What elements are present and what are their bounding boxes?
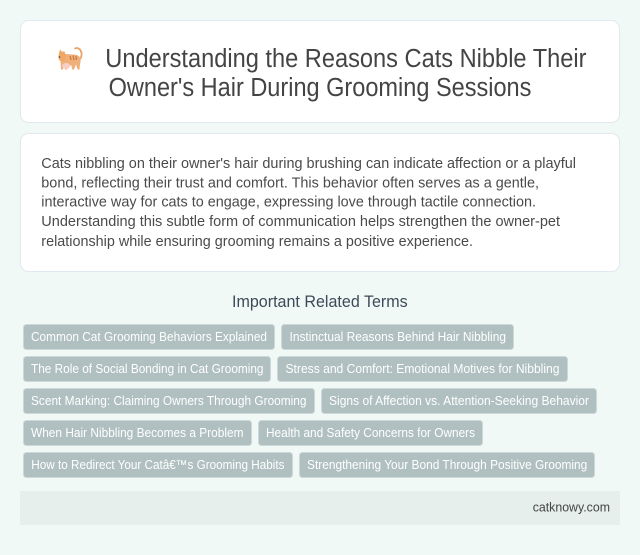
text block: description: Cats nibbling on their owner's hair during brushing can indicate affection or a playful <box>41 156 576 172</box>
tag 10 <box>300 452 594 478</box>
tag 6 <box>322 388 596 414</box>
text block: description: relationship while ensuring grooming remains a positive experience. <box>41 234 473 250</box>
tag 7: When Hair Nibbling Becomes a Problem <box>31 426 244 440</box>
tag 1: Common Cat Grooming Behaviors Explained <box>31 330 267 344</box>
tag 8 <box>258 420 482 446</box>
text block: description: interactive way for cats to engage, expressing love through tactile connection. <box>41 195 536 211</box>
tags: related terms <box>24 324 596 478</box>
tag 10: Strengthening Your Bond Through Positive Grooming <box>307 458 587 472</box>
tag 4 <box>278 356 568 382</box>
tag 5: Scent Marking: Claiming Owners Through Grooming <box>31 394 306 408</box>
tag 1 <box>24 324 274 350</box>
tag 3: The Role of Social Bonding in Cat Grooming <box>31 362 264 376</box>
tag 8: Health and Safety Concerns for Owners <box>266 426 475 440</box>
tag 7 <box>24 420 252 446</box>
tag 6: Signs of Affection vs. Attention-Seeking Behavior <box>329 394 589 408</box>
title: Understanding the Reasons Cats Nibble Their <box>105 45 587 73</box>
footer <box>20 491 620 525</box>
title <box>105 45 587 102</box>
heading: important related terms: Important Related Terms <box>232 293 408 311</box>
tag 5 <box>24 388 314 414</box>
text block: description <box>41 156 576 250</box>
text block: description: bond, reflecting their trust and comfort. This behavior often serves as a gentle, <box>41 175 539 191</box>
tag 4: Stress and Comfort: Emotional Motives for Nibbling <box>286 362 560 376</box>
panel: description card <box>20 134 620 272</box>
panel: title card <box>20 20 620 122</box>
title: Owner's Hair During Grooming Sessions <box>109 74 531 102</box>
tag 2: Instinctual Reasons Behind Hair Nibbling <box>290 330 506 344</box>
tag 3 <box>24 356 270 382</box>
tag 2 <box>282 324 514 350</box>
footer: catknowy.com <box>533 500 610 515</box>
text block: description: Understanding this subtle form of communication helps strengthen the owner-pet <box>41 214 560 230</box>
tag 9 <box>24 452 292 478</box>
icon: cat <box>58 48 82 70</box>
tag 9: How to Redirect Your Catâ€™s Grooming Habits <box>31 458 284 472</box>
